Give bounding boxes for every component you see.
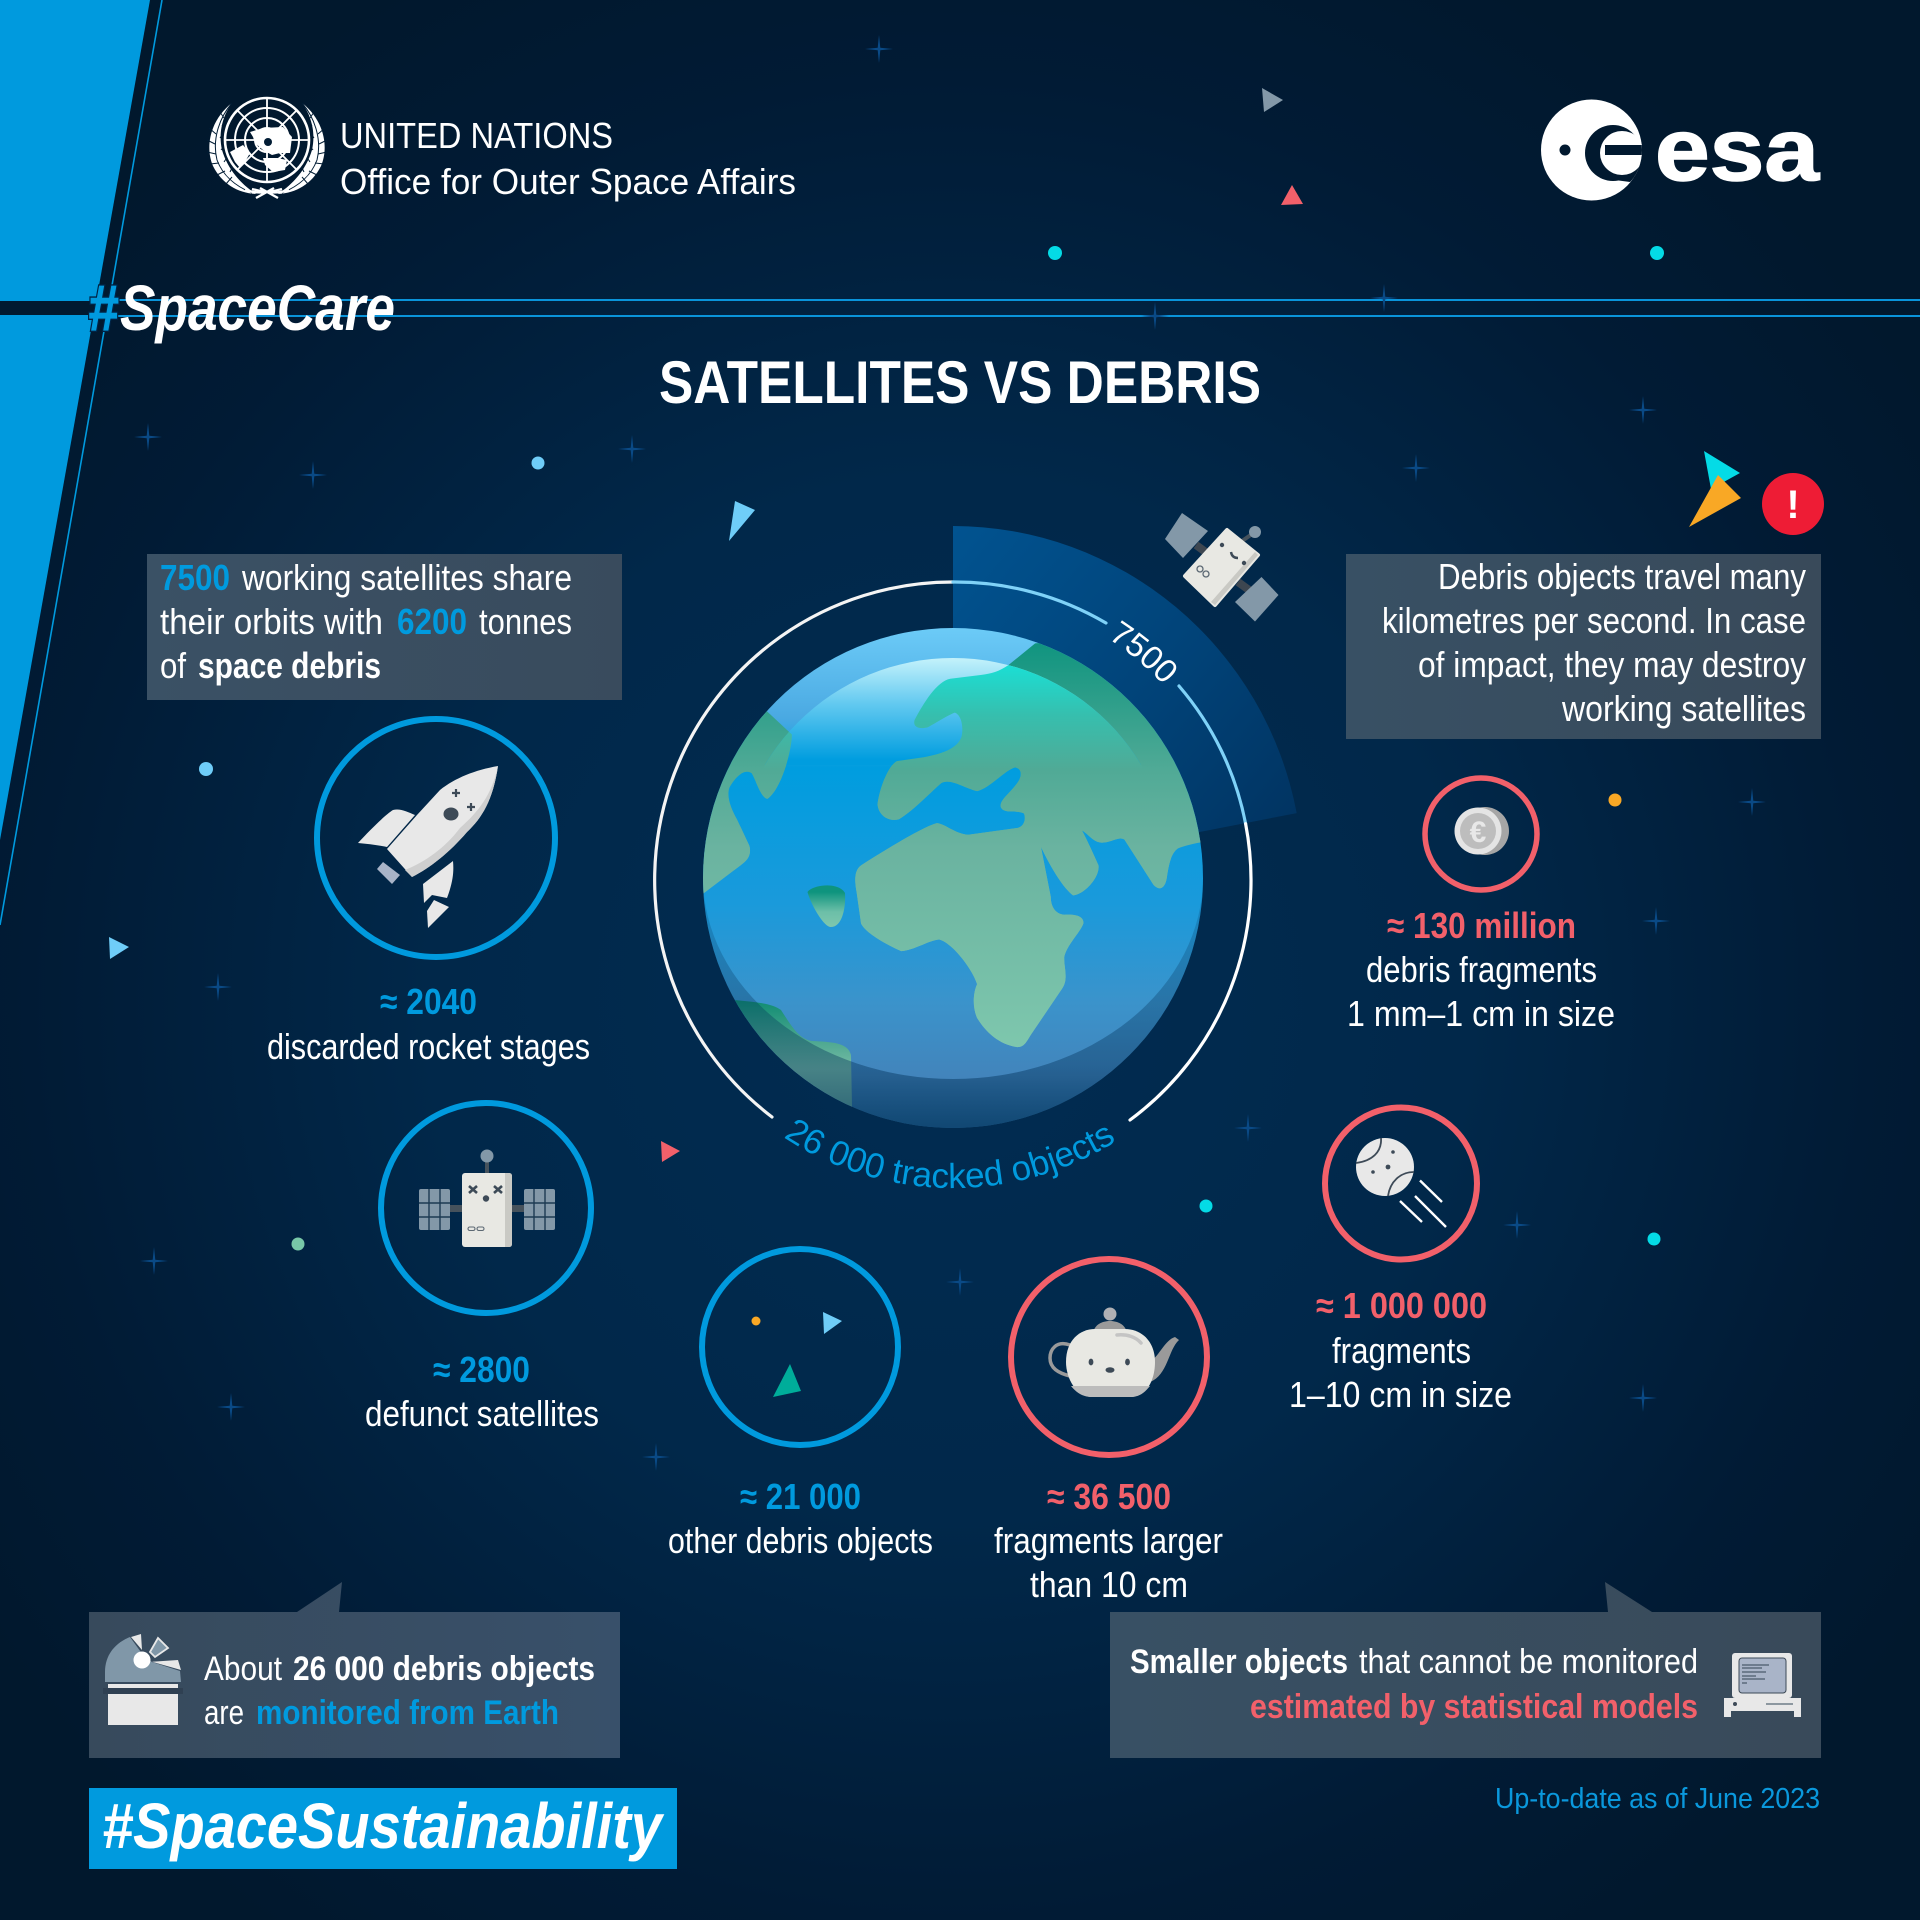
panel: impact warning: Debris objects travel many — [1438, 556, 1806, 597]
globe with orbit ring: 7500 — [1112, 620, 1176, 682]
icon: defunct satellite — [419, 1150, 555, 1247]
globe with orbit ring — [653, 526, 1296, 1188]
panel: satellites share orbits: tonnes — [479, 601, 572, 642]
stat: 130 million fragments: 1 mm–1 cm in size — [1347, 993, 1615, 1034]
label: 26 000 tracked objects — [645, 880, 1261, 1188]
stat: discarded rocket stages: ≈ 2040 — [380, 981, 477, 1022]
panel: satellites share orbits: of — [160, 645, 187, 686]
callout: statistical models: estimated by statistical models — [1250, 1688, 1698, 1726]
panel: impact warning: of impact, they may destroy — [1418, 644, 1806, 685]
callout: monitored from Earth: are — [204, 1694, 244, 1732]
hashtag: #SpaceCare: SpaceCare — [120, 272, 395, 344]
stat: other debris objects — [668, 1249, 933, 1561]
callout: monitored from Earth — [89, 1582, 620, 1758]
stat: 1 000 000 fragments — [1289, 1108, 1512, 1415]
date note: Up-to-date as of June 2023 — [1495, 1783, 1820, 1815]
icon: computer — [1724, 1653, 1801, 1717]
logo: esa: esa — [1655, 100, 1820, 199]
hashtag: #SpaceCare: # — [88, 272, 118, 344]
title: SATELLITES VS DEBRIS — [659, 349, 1261, 416]
stat: 1 000 000 fragments: 1–10 cm in size — [1289, 1374, 1512, 1415]
stat: defunct satellites — [365, 1103, 599, 1434]
panel: satellites share orbits: 6200 — [397, 601, 467, 642]
stat: fragments larger than 10 cm: than 10 cm — [1030, 1564, 1188, 1605]
logo: esa — [1541, 100, 1820, 200]
panel: satellites share orbits: space debris — [198, 645, 381, 686]
label: 7500 — [953, 593, 1240, 880]
stat: other debris objects: other debris objects — [668, 1520, 933, 1561]
stat: fragments larger than 10 cm: fragments larger — [994, 1520, 1223, 1561]
icon: euro coin — [1454, 807, 1509, 855]
callout: monitored from Earth: monitored from Earth — [256, 1694, 559, 1732]
callout: statistical models: Smaller objects — [1130, 1643, 1348, 1681]
globe with orbit ring: 26 000 tracked objects — [784, 1120, 1114, 1188]
stat: 130 million fragments: debris fragments — [1366, 949, 1597, 990]
icon: debris shards — [752, 1312, 842, 1397]
callout: monitored from Earth: 26 000 debris objects — [293, 1650, 595, 1688]
orbit ring — [655, 582, 1251, 1120]
icon: rocket — [358, 766, 498, 928]
logo text: UN Office for Outer Space Affairs — [340, 115, 796, 202]
callout: statistical models: that cannot be monitored — [1359, 1643, 1698, 1681]
icon: euro coin: € — [1470, 816, 1487, 849]
logo: United Nations emblem — [207, 98, 327, 198]
background stars — [134, 35, 1766, 1471]
stat: defunct satellites: defunct satellites — [365, 1393, 599, 1434]
icon: teapot — [1050, 1308, 1179, 1397]
stat: defunct satellites: ≈ 2800 — [433, 1349, 530, 1390]
panel: satellites share orbits: 7500 — [160, 557, 230, 598]
panel: impact warning: working satellites — [1561, 688, 1806, 729]
icon: baseball — [1356, 1138, 1446, 1227]
stat: 1 000 000 fragments: ≈ 1 000 000 — [1316, 1285, 1487, 1326]
panel: satellites share orbits: working satellites share — [241, 557, 572, 598]
stat: other debris objects: ≈ 21 000 — [740, 1476, 861, 1517]
panel: satellites share orbits: their orbits with — [160, 601, 383, 642]
panel: satellites share orbits — [147, 554, 622, 700]
stat: discarded rocket stages: discarded rocket stages — [267, 1026, 590, 1067]
stat: fragments larger than 10 cm — [994, 1259, 1223, 1605]
stat: fragments larger than 10 cm: ≈ 36 500 — [1047, 1476, 1171, 1517]
panel: impact warning — [1346, 554, 1821, 739]
callout: statistical models — [1110, 1582, 1821, 1758]
logo text: UN Office for Outer Space Affairs: Office for Outer Space Affairs — [340, 161, 796, 202]
stat: 1 000 000 fragments: fragments — [1332, 1330, 1471, 1371]
icon: working satellite — [1165, 513, 1278, 622]
decorative debris dots and triangles — [109, 88, 1664, 1250]
icon: observatory — [103, 1634, 183, 1725]
logo text: UN Office for Outer Space Affairs: UNITED NATIONS — [340, 115, 613, 156]
earth — [703, 628, 1203, 1128]
icon: warning with colliding shards — [1689, 451, 1824, 535]
stat: discarded rocket stages — [267, 719, 590, 1067]
hashtag: #SpaceCare: # — [88, 272, 118, 344]
stat: 130 million fragments — [1347, 778, 1615, 1034]
panel: impact warning: kilometres per second. In case — [1382, 600, 1806, 641]
callout: monitored from Earth: About — [204, 1650, 282, 1688]
working satellite sector — [953, 526, 1297, 880]
left blue wedge — [0, 0, 1920, 925]
stat: 130 million fragments: ≈ 130 million — [1387, 905, 1576, 946]
hashtag banner: #SpaceSustainability: #SpaceSustainability — [102, 1790, 665, 1862]
icon: warning with colliding shards: ! — [1786, 483, 1800, 527]
